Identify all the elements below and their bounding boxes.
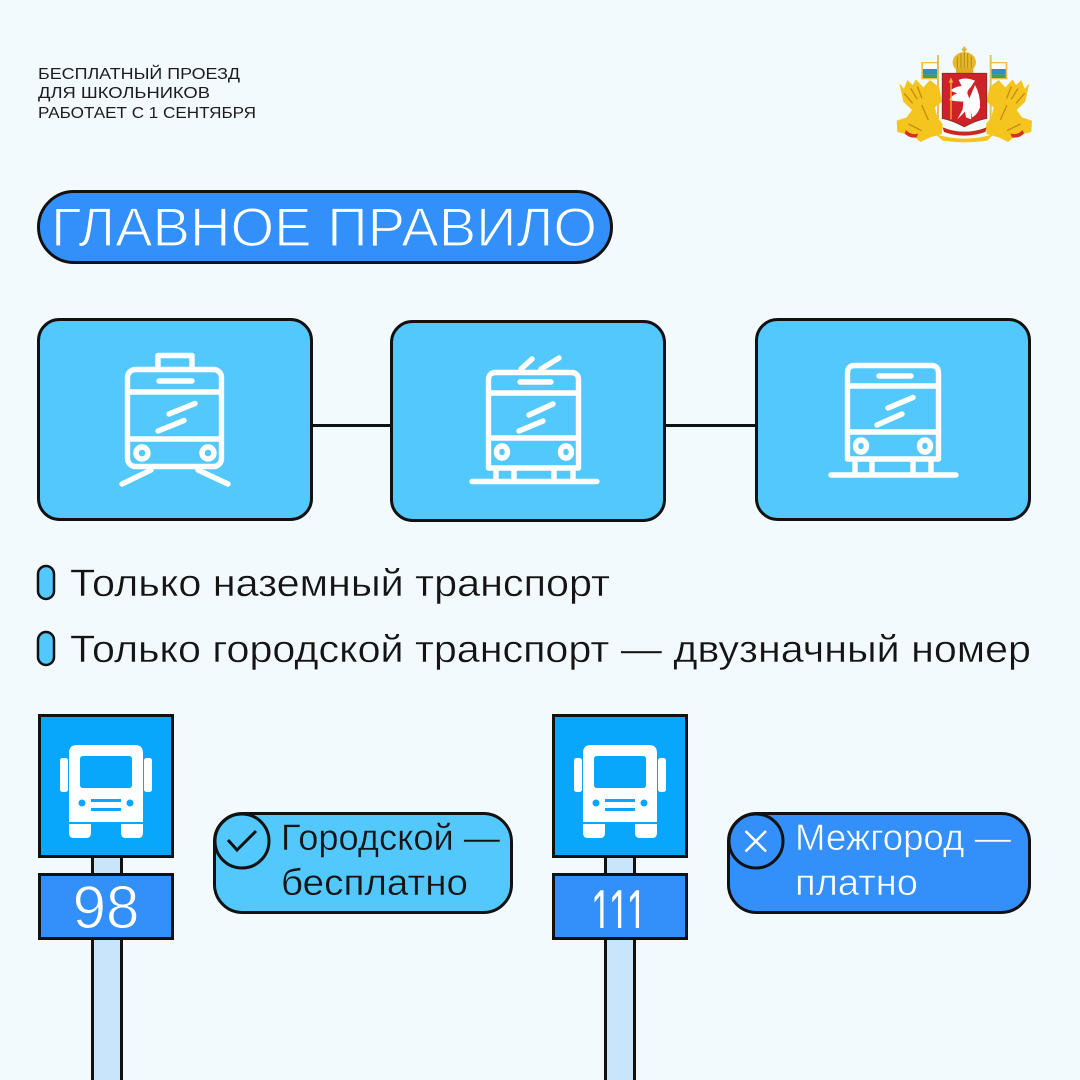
callout: intercity paid [728,814,1030,912]
callout: city free [214,814,512,912]
bus stop sign: 111: 111 [591,878,647,947]
icon: coat of arms [897,47,1032,142]
bullet: city transport: Только городской транспорт — двузначный номер [70,629,1031,671]
callout: city free: бесплатно [281,862,468,903]
icon: tram [122,356,228,484]
connector lines [312,424,757,427]
icon: bus front [574,745,666,838]
icon: bus [831,366,956,475]
panel: tram [38,320,312,520]
callout: intercity paid: Межгород — [795,817,1011,858]
panel: trolleybus [392,322,664,520]
bullet: ground transport: Только наземный транспорт [70,563,610,605]
icon: bus front [60,745,152,838]
bus stop sign: 98 [40,716,172,1080]
callout: intercity paid: платно [795,862,918,903]
callout: city free: Городской — [281,817,500,858]
header text: ДЛЯ ШКОЛЬНИКОВ [38,85,210,102]
icon: trolleybus [472,358,597,482]
bus stop sign: 98: 98 [73,874,139,941]
title pill: ГЛАВНОЕ ПРАВИЛО [51,196,597,258]
icon: cross [729,814,783,868]
header text [38,65,256,122]
header text: РАБОТАЕТ С 1 СЕНТЯБРЯ [38,105,256,122]
icon: check [215,814,269,868]
panel: bus [756,320,1030,520]
header text: БЕСПЛАТНЫЙ ПРОЕЗД [38,65,241,83]
bus stop sign: 111 [554,716,686,1080]
